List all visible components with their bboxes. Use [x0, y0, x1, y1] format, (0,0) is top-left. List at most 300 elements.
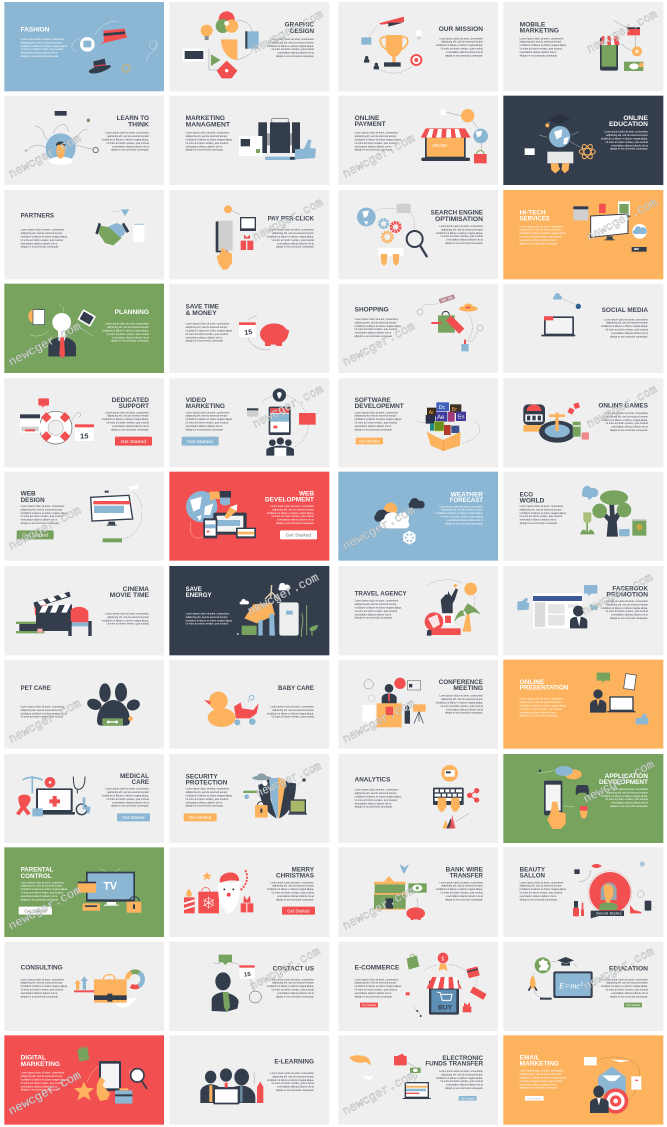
heading: cinema movie time: CINEMA: [123, 586, 149, 593]
button: Get Started: [122, 815, 145, 820]
heading: medical care: CARE: [132, 779, 149, 786]
panel: digital marketing: [4, 1035, 164, 1125]
watermarks: newcger.com: [340, 504, 418, 554]
text block: Lorem ipsum dolor sit amet, consectetur: [604, 600, 648, 603]
panel: eco world: [503, 472, 663, 561]
text block: Lorem ipsum dolor sit amet, consectetur: [439, 695, 483, 698]
text block: Lorem ipsum dolor sit amet, consectetur: [604, 978, 648, 981]
text block: Ut enim ad minim veniam, quis nostrud: [355, 610, 398, 613]
text block: incididunt ut labore et dolore magna aliqua.: [267, 712, 314, 715]
text block: Ut enim ad minim veniam, quis nostrud: [606, 610, 649, 613]
panel: online education: [503, 96, 663, 185]
button: [115, 437, 152, 446]
heading: merry christmas: CHRISTMAS: [276, 873, 315, 880]
text block: Lorem ipsum dolor sit amet, consectetur: [270, 38, 314, 41]
text block: aliquip ex ea commodo consequat.: [276, 995, 314, 998]
heading: online presentation: PRESENTATION: [520, 685, 568, 692]
text block: aliquip ex ea commodo consequat.: [186, 428, 224, 431]
text block: exercitation ullamco laboris nisi ut: [277, 52, 314, 55]
watermarks: newcger.com: [6, 697, 84, 747]
panel: fashion: [4, 2, 164, 91]
heading: security protection: PROTECTION: [186, 780, 228, 787]
watermarks: newcger.com: [340, 132, 418, 182]
text block: incididunt ut labore et dolore magna aliqua.: [267, 1079, 314, 1082]
heading: digital marketing: MARKETING: [21, 1061, 60, 1068]
text block: adipiscing elit, sed do eiusmod tempor: [520, 41, 562, 44]
text block: incididunt ut labore et dolore magna aliqua.: [267, 888, 314, 891]
text block: Lorem ipsum dolor sit amet, consectetur: [520, 225, 563, 228]
watermarks: newcger.com: [584, 8, 660, 57]
text block: incididunt ut labore et dolore magna aliqua.: [355, 985, 402, 988]
heading: facebook promotion: FACEBOOK: [612, 585, 648, 592]
text block: Lorem ipsum dolor sit amet, consectetur: [105, 613, 149, 616]
text block: Ut enim ad minim veniam, quis nostrud: [21, 892, 64, 895]
text block: aliquip ex ea commodo consequat.: [21, 898, 59, 901]
text block: aliquip ex ea commodo consequat.: [520, 1087, 558, 1090]
heading: electronic funds transfer: FUNDS TRANSFER: [425, 1061, 483, 1068]
text block: aliquip ex ea commodo consequat.: [445, 1087, 483, 1090]
heading: shopping: SHOPPING: [355, 306, 389, 313]
heading: software developemnt: SOFTWARE: [355, 397, 391, 404]
icon: digital marketing tablet: [74, 1046, 147, 1104]
text block: Lorem ipsum dolor sit amet, consectetur: [270, 881, 314, 884]
icon: software box: Ai: [429, 410, 433, 416]
watermarks: newcger.com: [340, 884, 418, 934]
text block: Ut enim ad minim veniam, quis nostrud: [21, 989, 64, 992]
panel: parental control: [4, 847, 164, 937]
heading: eco world: ECO: [520, 492, 533, 499]
heading: learn to think: THINK: [128, 121, 149, 128]
button: Get Started: [22, 533, 48, 539]
panel: analytics: [338, 754, 498, 843]
text block: exercitation ullamco laboris nisi ut: [21, 1085, 58, 1088]
panel: medical care: [4, 754, 164, 843]
text block: Ut enim ad minim veniam, quis nostrud: [520, 515, 563, 518]
text block: Ut enim ad minim veniam, quis nostrud: [272, 989, 315, 992]
heading: online presentation: ONLINE: [520, 679, 545, 686]
button: Get Started: [286, 533, 311, 539]
text block: exercitation ullamco laboris nisi ut: [520, 519, 557, 522]
text block: aliquip ex ea commodo consequat.: [276, 522, 314, 525]
panel: save energy: [169, 566, 329, 655]
panel: online games: [503, 378, 663, 467]
icon: christmas santa and gifts: [184, 870, 253, 913]
text block: aliquip ex ea commodo consequat.: [355, 428, 393, 431]
button: [117, 813, 150, 821]
text block: Ut enim ad minim veniam, quis nostrud: [520, 892, 563, 895]
text block: adipiscing elit, sed do eiusmod tempor: [606, 982, 648, 985]
panel: web development: [169, 472, 329, 561]
icon: software box: En: [458, 414, 465, 420]
text block: incididunt ut labore et dolore magna aliqua.: [601, 795, 648, 798]
heading: marketing managment: [186, 115, 230, 128]
heading: beauty sallon: [520, 867, 546, 879]
heading: contact us: CONTACT US: [273, 965, 315, 972]
text block: aliquip ex ea commodo consequat.: [111, 149, 149, 152]
text block: exercitation ullamco laboris nisi ut: [611, 802, 648, 805]
panel: e-learning: [169, 1035, 329, 1125]
watermarks: newcger.com: [6, 1069, 84, 1119]
watermarks: newcger.com: [581, 945, 657, 994]
text block: exercitation ullamco laboris nisi ut: [21, 519, 58, 522]
panel: beauty sallon: [503, 847, 663, 937]
text block: exercitation ullamco laboris nisi ut: [112, 425, 149, 428]
heading: security protection: SECURITY: [186, 774, 218, 781]
text block: adipiscing elit, sed do eiusmod tempor: [186, 135, 228, 138]
text block: incididunt ut labore et dolore magna aliqua.: [436, 1077, 483, 1080]
text block: adipiscing elit, sed do eiusmod tempor: [272, 982, 314, 985]
text block: incididunt ut labore et dolore magna aliqua.: [21, 45, 68, 48]
text block: exercitation ullamco laboris nisi ut: [277, 242, 314, 245]
heading: mobile marketing: [520, 21, 559, 34]
text block: adipiscing elit, sed do eiusmod tempor: [355, 321, 397, 324]
text block: incididunt ut labore et dolore magna aliqua.: [21, 512, 68, 515]
heading: merry christmas: [276, 866, 315, 880]
watermarks: newcger.com: [340, 1069, 418, 1119]
panel: security protection: [169, 754, 329, 843]
watermarks: newcger.com: [584, 196, 660, 245]
watermarks: newcger.com: [6, 504, 84, 554]
text block: Ut enim ad minim veniam, quis nostrud: [107, 798, 150, 801]
heading: save time & money: [186, 304, 220, 317]
heading: mobile marketing: MOBILE: [520, 21, 546, 28]
heading: conference meeting: CONFERENCE: [439, 679, 484, 686]
icon: software box: [417, 402, 480, 451]
watermarks: newcger.com: [6, 320, 84, 370]
text block: Ut enim ad minim veniam, quis nostrud: [355, 328, 398, 331]
heading: eco world: [520, 492, 545, 504]
text block: adipiscing elit, sed do eiusmod tempor: [441, 698, 483, 701]
text block: Lorem ipsum dolor sit amet, consectetur: [270, 229, 314, 232]
text block: Lorem ipsum dolor sit amet, consectetur: [105, 411, 149, 414]
text block: aliquip ex ea commodo consequat.: [276, 898, 314, 901]
text block: Ut enim ad minim veniam, quis nostrud: [272, 515, 315, 518]
text block: adipiscing elit, sed do eiusmod tempor: [272, 885, 314, 888]
heading: bank wire transfer: TRANSFER: [450, 872, 483, 879]
heading: weather forecast: FORECAST: [450, 497, 483, 504]
text block: Lorem ipsum dolor sit amet, consectetur: [520, 698, 563, 701]
heading: web development: DEVELOPMENT: [265, 497, 314, 504]
text block: Ut enim ad minim veniam, quis nostrud: [441, 48, 484, 51]
icon: software box: Dc: [439, 405, 446, 411]
panel: conference meeting: [338, 660, 498, 749]
text block: adipiscing elit, sed do eiusmod tempor: [355, 135, 397, 138]
panel: e-commerce: [338, 942, 498, 1031]
text block: incididunt ut labore et dolore magna aliqua.: [355, 325, 402, 328]
text block: adipiscing elit, sed do eiusmod tempor: [520, 1073, 562, 1076]
text block: Ut enim ad minim veniam, quis nostrud: [606, 989, 649, 992]
text block: exercitation ullamco laboris nisi ut: [277, 519, 314, 522]
text block: Ut enim ad minim veniam, quis nostrud: [272, 716, 315, 719]
panel: marketing managment: [169, 96, 329, 185]
text block: incididunt ut labore et dolore magna aliqua.: [355, 138, 402, 141]
heading: online payment: ONLINE: [355, 115, 380, 122]
panel: pay per click: [169, 190, 329, 279]
heading: search engine optimisation: [431, 209, 484, 223]
icon: lifebuoy support: 15: [80, 432, 89, 441]
heading: graphic design: GRAPHIC: [285, 22, 314, 29]
watermarks: newcger.com: [584, 383, 660, 432]
text block: aliquip ex ea commodo consequat.: [610, 617, 648, 620]
text block: exercitation ullamco laboris nisi ut: [611, 426, 648, 429]
icon: beauty salon: Social Styles: [596, 911, 621, 916]
heading: partners: PARTNERS: [21, 213, 55, 220]
heading: facebook promotion: [606, 585, 648, 598]
heading: web design: DESIGN: [21, 497, 45, 504]
text block: incididunt ut labore et dolore magna aliqua.: [267, 45, 314, 48]
heading: weather forecast: [450, 492, 483, 504]
panel: contact us: [169, 942, 329, 1031]
heading: marketing managment: MARKETING: [186, 115, 225, 122]
heading: electronic funds transfer: ELECTRONIC: [442, 1055, 483, 1062]
panel: application development: [503, 754, 663, 843]
heading: baby care: BABY CARE: [278, 685, 315, 692]
icon: contact person: [212, 955, 261, 1012]
text block: incididunt ut labore et dolore magna aliqua.: [436, 232, 483, 235]
panel: social media: [503, 284, 663, 373]
text block: Ut enim ad minim veniam, quis nostrud: [520, 48, 563, 51]
text block: Ut enim ad minim veniam, quis nostrud: [441, 235, 484, 238]
icon: e-commerce store: [406, 953, 487, 1017]
icon: consulting briefcase: [74, 972, 143, 1008]
heading: consulting: CONSULTING: [21, 965, 63, 972]
heading: hi-tech services: SERVICES: [520, 215, 550, 222]
text block: adipiscing elit, sed do eiusmod tempor: [441, 885, 483, 888]
text block: incididunt ut labore et dolore magna aliqua.: [601, 985, 648, 988]
text block: aliquip ex ea commodo consequat.: [276, 1089, 314, 1092]
text block: exercitation ullamco laboris nisi ut: [520, 1083, 557, 1086]
button: [280, 530, 317, 539]
icon: e-learning tablet and rocket: E=mc²: [558, 981, 583, 991]
text block: Lorem ipsum dolor sit amet, consectetur: [186, 613, 229, 616]
text block: Lorem ipsum dolor sit amet, consectetur: [21, 38, 64, 41]
button: [17, 530, 54, 539]
text block: Ut enim ad minim veniam, quis nostrud: [272, 239, 315, 242]
text block: Lorem ipsum dolor sit amet, consectetur: [520, 1070, 563, 1073]
text block: Lorem ipsum dolor sit amet, consectetur: [355, 318, 398, 321]
panel: facebook promotion: [503, 566, 663, 655]
watermarks: newcger.com: [250, 383, 326, 432]
button: [360, 1003, 378, 1007]
icon: thinking person: [25, 111, 98, 165]
heading: e-learning: E-LEARNING: [274, 1059, 314, 1066]
icon: hi-tech devices: [573, 201, 647, 252]
watermarks: newcger.com: [581, 758, 657, 807]
text block: incididunt ut labore et dolore magna aliqua.: [186, 619, 233, 622]
text block: incididunt ut labore et dolore magna aliqua.: [355, 795, 402, 798]
text block: Ut enim ad minim veniam, quis nostrud: [107, 142, 150, 145]
text block: adipiscing elit, sed do eiusmod tempor: [107, 326, 149, 329]
text block: Ut enim ad minim veniam, quis nostrud: [21, 239, 64, 242]
heading: cinema movie time: [110, 586, 150, 599]
heading: pay per click: PAY PER CLICK: [268, 216, 314, 223]
icon: trophy and goals: [361, 17, 422, 73]
text block: exercitation ullamco laboris nisi ut: [277, 895, 314, 898]
heading: online payment: PAYMENT: [355, 121, 386, 128]
heading: graphic design: [285, 22, 314, 35]
text block: adipiscing elit, sed do eiusmod tempor: [606, 322, 648, 325]
text block: Ut enim ad minim veniam, quis nostrud: [520, 708, 563, 711]
text block: incididunt ut labore et dolore magna aliqua.: [520, 1076, 567, 1079]
text block: incididunt ut labore et dolore magna aliqua.: [520, 888, 567, 891]
icon: facebook page and person: [517, 585, 597, 628]
text block: adipiscing elit, sed do eiusmod tempor: [606, 603, 648, 606]
text block: incididunt ut labore et dolore magna aliqua.: [102, 329, 149, 332]
icon: travel statue and palm: [425, 580, 481, 636]
icon: globe and keyboard: [525, 114, 595, 173]
button: [356, 438, 383, 444]
text block: exercitation ullamco laboris nisi ut: [520, 51, 557, 54]
text block: incididunt ut labore et dolore magna aliqua.: [21, 1078, 68, 1081]
text block: Ut enim ad minim veniam, quis nostrud: [272, 48, 315, 51]
heading: medical care: [120, 773, 149, 786]
text block: adipiscing elit, sed do eiusmod tempor: [21, 1075, 63, 1078]
text block: Lorem ipsum dolor sit amet, consectetur: [355, 132, 398, 135]
text block: Lorem ipsum dolor sit amet, consectetur: [105, 132, 149, 135]
text block: Ut enim ad minim veniam, quis nostrud: [186, 623, 229, 626]
text block: aliquip ex ea commodo consequat.: [21, 995, 59, 998]
text block: incididunt ut labore et dolore magna aliqua.: [267, 985, 314, 988]
heading: parental control: PARENTAL: [21, 867, 53, 874]
text block: Ut enim ad minim veniam, quis nostrud: [441, 892, 484, 895]
icon: seo gears and magnifier: [357, 204, 427, 266]
panel: dedicated support: [4, 378, 164, 467]
text block: Ut enim ad minim veniam, quis nostrud: [520, 1080, 563, 1083]
text block: aliquip ex ea commodo consequat.: [520, 54, 558, 57]
text block: aliquip ex ea commodo consequat.: [186, 805, 224, 808]
text block: incididunt ut labore et dolore magna aliqua.: [601, 137, 648, 140]
watermarks: newcger.com: [340, 697, 418, 747]
text block: Lorem ipsum dolor sit amet, consectetur: [355, 600, 398, 603]
text block: Lorem ipsum dolor sit amet, consectetur: [21, 881, 64, 884]
heading: video marketing: MARKETING: [186, 403, 225, 410]
heading: beauty sallon: SALLON: [520, 872, 545, 879]
icon: bulb-head businessman: [28, 305, 96, 359]
heading: education: EDUCATION: [609, 965, 648, 972]
text block: exercitation ullamco laboris nisi ut: [355, 425, 392, 428]
panel: cinema movie time: [4, 566, 164, 655]
text block: incididunt ut labore et dolore magna aliqua.: [520, 512, 567, 515]
text block: Ut enim ad minim veniam, quis nostrud: [21, 716, 64, 719]
heading: bank wire transfer: BANK WIRE: [446, 867, 484, 874]
text block: incididunt ut labore et dolore magna aliqua.: [601, 325, 648, 328]
text block: adipiscing elit, sed do eiusmod tempor: [186, 326, 228, 329]
text block: exercitation ullamco laboris nisi ut: [611, 614, 648, 617]
text block: aliquip ex ea commodo consequat.: [445, 522, 483, 525]
watermarks: newcger.com: [250, 196, 326, 245]
text block: aliquip ex ea commodo consequat.: [610, 335, 648, 338]
text block: Ut enim ad minim veniam, quis nostrud: [355, 799, 398, 802]
panel: email marketing: [503, 1035, 663, 1125]
heading: planning: PLANNING: [115, 309, 149, 316]
heading: merry christmas: MERRY: [292, 866, 315, 873]
panel: hi-tech services: [503, 190, 663, 279]
icon: funds transfer laptop: [349, 1054, 431, 1099]
icon: tv and lock: TV: [103, 880, 118, 892]
text block: adipiscing elit, sed do eiusmod tempor: [520, 885, 562, 888]
icon: shopping items: [417, 294, 483, 351]
text block: exercitation ullamco laboris nisi ut: [520, 711, 557, 714]
icon: piggy bank and calendar: 15: [244, 329, 253, 337]
text block: exercitation ullamco laboris nisi ut: [355, 613, 392, 616]
button: Get Started: [121, 439, 146, 445]
panel: pet care: [4, 660, 164, 749]
icon: e-commerce store: BUY: [438, 1005, 453, 1012]
heading: save time & money: SAVE TIME: [186, 304, 220, 311]
watermarks: newcger.com: [579, 571, 655, 619]
button: Get Started: [287, 908, 310, 913]
text block: Ut enim ad minim veniam, quis nostrud: [186, 333, 229, 336]
heading: email marketing: MARKETING: [520, 1061, 559, 1068]
text block: incididunt ut labore et dolore magna aliqua.: [102, 418, 149, 421]
heading: beauty sallon: BEAUTY: [520, 867, 546, 874]
text block: adipiscing elit, sed do eiusmod tempor: [21, 982, 63, 985]
text block: Lorem ipsum dolor sit amet, consectetur: [186, 132, 229, 135]
text block: exercitation ullamco laboris nisi ut: [112, 145, 149, 148]
heading: conference meeting: MEETING: [453, 685, 483, 692]
text block: Ut enim ad minim veniam, quis nostrud: [441, 1080, 484, 1083]
heading: application development: [599, 773, 648, 786]
text block: incididunt ut labore et dolore magna aliqua.: [21, 712, 68, 715]
text block: Ut enim ad minim veniam, quis nostrud: [606, 329, 649, 332]
icon: medical laptop: [16, 776, 91, 816]
text block: exercitation ullamco laboris nisi ut: [611, 332, 648, 335]
text block: exercitation ullamco laboris nisi ut: [277, 1086, 314, 1089]
heading: digital marketing: [21, 1055, 60, 1068]
heading: software developemnt: DEVELOPEMNT: [355, 403, 404, 410]
text block: adipiscing elit, sed do eiusmod tempor: [606, 791, 648, 794]
watermarks: newcger.com: [254, 759, 324, 801]
text block: adipiscing elit, sed do eiusmod tempor: [606, 134, 648, 137]
text block: adipiscing elit, sed do eiusmod tempor: [272, 232, 314, 235]
icon: e-learning tablet and rocket: [528, 957, 593, 1000]
icon: web design monitor: [91, 484, 142, 542]
text block: incididunt ut labore et dolore magna aliqua.: [436, 44, 483, 47]
text block: exercitation ullamco laboris nisi ut: [446, 1084, 483, 1087]
text block: Lorem ipsum dolor sit amet, consectetur: [21, 505, 64, 508]
icon: security shield: [243, 768, 315, 818]
text block: Lorem ipsum dolor sit amet, consectetur: [186, 323, 229, 326]
text block: incididunt ut labore et dolore magna aliqua.: [520, 704, 567, 707]
text block: adipiscing elit, sed do eiusmod tempor: [107, 791, 149, 794]
text block: Lorem ipsum dolor sit amet, consectetur: [439, 1070, 483, 1073]
text block: aliquip ex ea commodo consequat.: [445, 898, 483, 901]
text block: Lorem ipsum dolor sit amet, consectetur: [604, 412, 648, 415]
text block: Lorem ipsum dolor sit amet, consectetur: [439, 225, 483, 228]
text block: aliquip ex ea commodo consequat.: [111, 340, 149, 343]
heading: digital marketing: DIGITAL: [21, 1055, 46, 1062]
text block: Ut enim ad minim veniam, quis nostrud: [21, 48, 64, 51]
panel: online presentation: [503, 660, 663, 749]
heading: save energy: SAVE: [186, 586, 202, 593]
heading: cinema movie time: MOVIE TIME: [110, 592, 150, 599]
text block: Lorem ipsum dolor sit amet, consectetur: [21, 706, 64, 709]
text block: exercitation ullamco laboris nisi ut: [355, 145, 392, 148]
text block: adipiscing elit, sed do eiusmod tempor: [272, 508, 314, 511]
text block: aliquip ex ea commodo consequat.: [520, 715, 558, 718]
button: Get Started: [528, 1096, 542, 1100]
text block: incididunt ut labore et dolore magna aliqua.: [102, 619, 149, 622]
text block: incididunt ut labore et dolore magna aliqua.: [436, 512, 483, 515]
text block: aliquip ex ea commodo consequat.: [21, 1089, 59, 1092]
text block: Lorem ipsum dolor sit amet, consectetur: [604, 131, 648, 134]
watermarks: newcger.com: [247, 945, 323, 994]
icon: mobile shop: [600, 21, 644, 71]
panel: video marketing: [169, 378, 329, 467]
text block: incididunt ut labore et dolore magna aliqua.: [601, 419, 648, 422]
panel: travel agency: [338, 566, 498, 655]
button: [282, 907, 315, 915]
